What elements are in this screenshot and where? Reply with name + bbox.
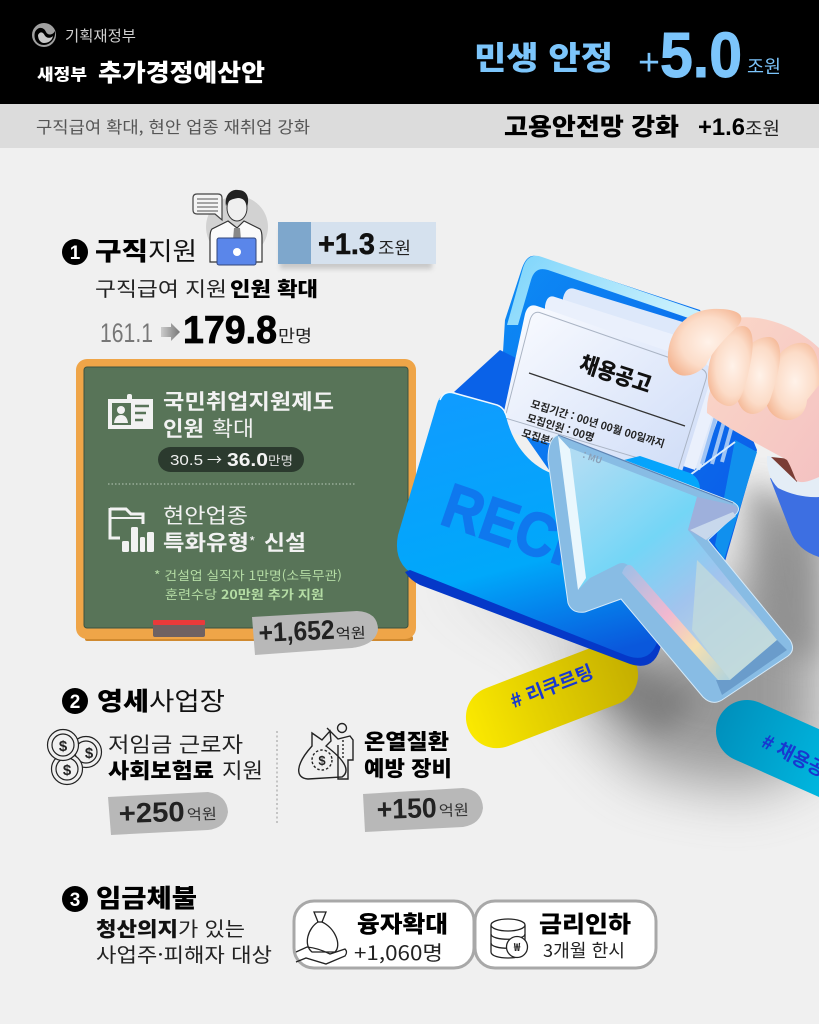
cursor tail bbox=[692, 560, 777, 680]
new category heading: 신설 bbox=[264, 527, 306, 557]
number badge 2: 2 bbox=[70, 692, 80, 713]
target description: 가 있는 bbox=[178, 913, 245, 942]
arrow bbox=[161, 323, 180, 341]
category note: * 건설업 실직자 1만명(소득무관) bbox=[154, 565, 342, 584]
benefit figures: 179.8 bbox=[183, 309, 277, 352]
folder front panel bbox=[397, 393, 700, 661]
section 3 heading: 임금체불 bbox=[96, 879, 197, 915]
pill: recruiting hashtag: # 리쿠르팅 bbox=[506, 657, 597, 714]
category note bbox=[154, 565, 342, 603]
panel: chalkboard bbox=[76, 359, 416, 641]
low-wage insurance text: 저임금 근로자 bbox=[108, 729, 243, 759]
icon: coin stack bbox=[491, 919, 528, 958]
rate text: 3개월 한시 bbox=[543, 937, 625, 963]
low-wage insurance text bbox=[108, 729, 263, 785]
figures pill: 30.5 bbox=[170, 452, 203, 469]
illustration: glass cursor bbox=[548, 435, 793, 702]
program heading: 인원 bbox=[163, 413, 204, 443]
illustration shadow bbox=[430, 480, 819, 790]
job seeker benefit text: 구직급여 지원 bbox=[95, 273, 227, 302]
tag +250: 억원 bbox=[186, 803, 217, 825]
icon: id card bbox=[108, 394, 153, 429]
icon: hand with bag bbox=[296, 912, 346, 964]
title: 추가경정예산안 bbox=[98, 53, 265, 88]
subheader amount: 조원 bbox=[745, 115, 780, 141]
section 1 heading bbox=[62, 232, 197, 268]
section 2 heading: 사업장 bbox=[149, 682, 225, 718]
number badge 1: 1 bbox=[70, 243, 81, 264]
recruitment notice card: 모집인원 : 00명 bbox=[525, 410, 596, 445]
recruitment notice card: 채용공고 bbox=[576, 346, 656, 400]
cursor outer bbox=[548, 435, 793, 702]
title: 새정부 bbox=[37, 61, 87, 85]
heat illness equipment text: 온열질환 bbox=[364, 726, 449, 756]
recruitment notice card bbox=[500, 305, 712, 478]
folder back panel bbox=[500, 256, 757, 600]
figures pill: 만명 bbox=[268, 450, 293, 469]
section 3 heading bbox=[62, 879, 197, 915]
section 2 heading bbox=[62, 682, 225, 718]
tag +250 bbox=[108, 792, 228, 835]
loan text: 융자확대 bbox=[357, 905, 448, 939]
icon: coins bbox=[48, 730, 102, 784]
section 1 heading: 구직 bbox=[95, 232, 148, 268]
target description: 청산의지 bbox=[96, 913, 178, 942]
target description bbox=[96, 913, 272, 968]
program heading: 확대 bbox=[212, 413, 254, 443]
rate text: 금리인하 bbox=[539, 905, 631, 939]
subheader amount bbox=[504, 107, 780, 142]
tag +150 bbox=[363, 788, 483, 832]
cursor glass face bbox=[570, 448, 777, 680]
tag +1,652: +1,652 bbox=[258, 615, 335, 648]
subheader amount: 고용안전망 강화 bbox=[504, 107, 679, 142]
low-wage insurance text: 지원 bbox=[222, 755, 263, 785]
number badge 2 bbox=[62, 688, 88, 714]
header bar bbox=[0, 0, 819, 104]
tag +150: 억원 bbox=[438, 799, 469, 821]
tag +150: +150 bbox=[376, 792, 437, 825]
cursor highlight edge bbox=[558, 436, 586, 590]
folder recruit text: RECRUIT bbox=[433, 471, 688, 616]
recruitment notice card: 모집분야 : 00 bbox=[520, 425, 582, 457]
benefit figures bbox=[100, 309, 312, 352]
recruitment notice card: 모집기간 : 00년 00월 00일까지 bbox=[529, 396, 666, 452]
new category heading: * bbox=[249, 532, 256, 552]
subheader amount: +1.6 bbox=[698, 114, 745, 141]
section 2 heading: 영세 bbox=[97, 682, 149, 718]
figures pill: 36.0 bbox=[227, 450, 268, 470]
illustration: hand holding card bbox=[668, 309, 819, 557]
loan text: +1,060명 bbox=[354, 937, 443, 966]
subheader description: 구직급여 확대, 현안 업종 재취업 강화 bbox=[36, 114, 310, 138]
number badge 3: 3 bbox=[70, 890, 80, 911]
figures pill bbox=[158, 447, 304, 472]
ministry name: 기획재정부 bbox=[65, 25, 136, 46]
icon: coin stack: ₩ bbox=[513, 939, 521, 955]
title bbox=[37, 53, 265, 88]
rate text bbox=[539, 905, 631, 963]
low-wage insurance text: 사회보험료 bbox=[108, 755, 214, 785]
illustration: glass cursor: : MU bbox=[581, 448, 604, 467]
heat illness equipment text: 예방 장비 bbox=[364, 753, 452, 783]
pill: recruiting hashtag bbox=[457, 635, 647, 757]
tag +1,652 bbox=[252, 611, 378, 655]
folder stacked cards bbox=[545, 288, 743, 475]
benefit figures: 만명 bbox=[278, 322, 312, 347]
new category heading: 현안업종 bbox=[163, 500, 248, 530]
target description: 사업주·피해자 대상 bbox=[96, 939, 272, 968]
headline amount: 5.0 bbox=[660, 19, 742, 91]
job seeker benefit text bbox=[95, 273, 318, 302]
pill: hiring hashtag bbox=[716, 700, 819, 797]
sleeve bbox=[767, 456, 819, 557]
loan text bbox=[354, 905, 448, 966]
new category heading: 특화유형 bbox=[163, 527, 249, 557]
new category heading bbox=[163, 500, 306, 557]
program heading bbox=[163, 386, 334, 443]
heat illness equipment text bbox=[364, 726, 452, 783]
fingers bbox=[668, 309, 819, 420]
headline amount bbox=[474, 19, 781, 91]
tag +250: +250 bbox=[118, 796, 185, 829]
job seeker benefit text: 인원 확대 bbox=[230, 273, 318, 302]
cursor wing highlight bbox=[688, 497, 738, 540]
headline amount: 민생 안정 bbox=[474, 33, 613, 79]
icon: government logo bbox=[32, 23, 56, 47]
figures pill: → bbox=[207, 449, 222, 470]
budget box +1.3: +1.3 bbox=[318, 228, 375, 261]
card: loan expansion bbox=[294, 901, 474, 968]
icon: coins: $ bbox=[85, 745, 94, 762]
section 1 heading: 지원 bbox=[148, 232, 197, 268]
icon: job seeker with laptop bbox=[193, 190, 268, 265]
headline amount: + bbox=[638, 42, 660, 84]
eraser bbox=[153, 620, 205, 637]
category note: 훈련수당 bbox=[165, 584, 218, 603]
budget box +1.3: 조원 bbox=[378, 234, 411, 259]
tag +1,652: 억원 bbox=[335, 622, 366, 644]
icon: money bag and worker: $ bbox=[318, 753, 326, 768]
category note: 20만원 추가 지원 bbox=[221, 584, 324, 603]
icon: money bag and worker bbox=[299, 724, 353, 779]
budget box +1.3 bbox=[278, 222, 436, 269]
card: interest rate cut bbox=[475, 901, 656, 968]
icon: coins: $ bbox=[63, 762, 72, 779]
headline amount: 조원 bbox=[747, 53, 781, 79]
palm bbox=[705, 317, 819, 482]
illustration: recruit folder bbox=[397, 256, 757, 666]
benefit figures: 161.1 bbox=[100, 318, 153, 348]
icon: coins: $ bbox=[59, 738, 68, 755]
program heading: 국민취업지원제도 bbox=[163, 386, 334, 416]
cursor rainbow edge bbox=[622, 565, 735, 690]
subheader band bbox=[0, 104, 819, 148]
icon: folder chart bbox=[110, 508, 154, 552]
